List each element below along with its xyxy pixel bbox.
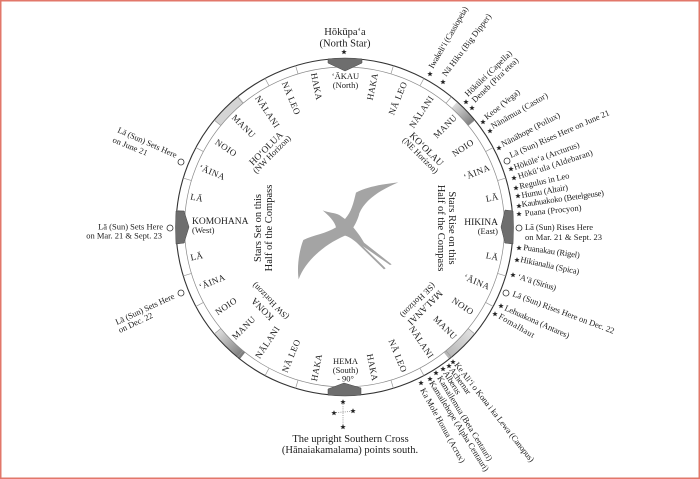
sunset label: December 22: on Dec. 22 (117, 310, 154, 335)
southeast rising stars: Fomalhaut (497, 311, 537, 340)
house labels: east half: NOIO (450, 295, 476, 317)
house labels: west half: NĀ LEO (280, 338, 303, 374)
horizon label: northwest: HOʻOLUA (248, 130, 286, 168)
cardinal marker: south (328, 383, 361, 396)
horizon label: northeast: KOʻOLAU (407, 131, 445, 169)
house labels: east half (365, 72, 500, 382)
note: stars rise: Half of the Compass (435, 185, 446, 271)
southern stars fan: Ka Mole Honua (Acrux) (418, 386, 468, 465)
horizon label: southeast: (SE Horizon) (398, 281, 438, 320)
northeast rising stars: Nānāhope (Pollux) (499, 110, 562, 149)
house labels: west half: ʻĀINA (198, 272, 227, 292)
southern cross caption (282, 434, 418, 456)
northeast rising stars (426, 4, 611, 218)
sunset label: equinox: Lā (Sun) Sets Here (98, 222, 163, 232)
house labels: west half: NOIO (213, 137, 239, 159)
house labels: east half: LĀ (485, 191, 500, 204)
sunset label: June 21: on June 21 (111, 135, 149, 158)
house labels: west half: NĀ LEO (280, 80, 303, 116)
northeast rising stars: Keoe (Vega) (482, 87, 522, 122)
house labels: east half: NĀLANI (407, 324, 436, 360)
direction label: east (464, 218, 498, 236)
southeast rising stars: Lehuakona (Antares) (503, 303, 571, 340)
house labels: west half (190, 72, 324, 382)
cardinal marker: west (176, 211, 189, 244)
house labels: west half: NĀLANI (253, 324, 282, 360)
cardinal marker: east (501, 210, 514, 244)
northeast rising stars: Hōkūlei (Capella) (462, 48, 514, 98)
northeast rising stars: Hōkūleʻa (Arcturus) (512, 139, 581, 172)
house labels: east half: NĀ LEO (387, 80, 409, 116)
note: stars rise (435, 185, 457, 271)
sunset label: December 22: Lā (Sun) Sets Here (114, 291, 176, 327)
direction label: south: HEMA (333, 356, 359, 366)
house labels: west half: HAKA (309, 72, 324, 101)
house labels: east half: MANU (431, 314, 459, 342)
southeast rising stars: ʻAʻā (Sirius) (516, 271, 558, 293)
house labels: west half: MANU (230, 112, 258, 140)
iwa bird silhouette (298, 182, 398, 279)
northeast rising stars: Regulus in Leo (518, 170, 570, 191)
house labels: west half: LĀ (190, 191, 204, 204)
direction label: north: (North) (333, 80, 358, 90)
direction label: west: (West) (192, 225, 215, 235)
northeast rising stars: Nānāmua (Castor) (489, 90, 550, 131)
north star label (319, 27, 371, 54)
southern stars fan: Kamailemua (Beta Centauri) (435, 374, 495, 463)
house labels: west half: HAKA (309, 353, 324, 382)
northeast rising stars: Humu (Altair) (521, 182, 569, 200)
southern cross caption: The upright Southern Cross (292, 434, 409, 445)
northeast rising stars: Nā Hiku (Big Dipper) (440, 11, 493, 78)
northeast rising stars: Kauhuakoko (Betelgeuse) (521, 188, 605, 209)
northeast rising stars: Iwakeliʻi (Cassiopeia) (426, 4, 470, 70)
house labels: east half: ʻĀINA (462, 272, 492, 292)
house labels: east half: HAKA (365, 353, 380, 382)
equinox sunrise label: on Mar. 21 & Sept. 23 (525, 232, 602, 242)
house labels: east half: NĀ LEO (387, 338, 409, 374)
house labels: west half: LĀ (190, 250, 204, 263)
horizon label: northeast: (NE Horizon) (400, 135, 441, 175)
house labels: west half: ʻĀINA (198, 162, 227, 182)
southern stars fan: Achernar (447, 365, 474, 396)
direction label: south: (South) (333, 365, 358, 375)
southeast rising stars: Lā (Sun) Rises Here on Dec. 22 (511, 289, 616, 336)
note: stars set: Half of the Compass (264, 185, 275, 271)
house labels: east half: NĀLANI (407, 94, 436, 130)
southeast rising stars (492, 242, 616, 340)
compass ring (176, 58, 513, 396)
direction label: west (192, 217, 249, 235)
house labels: west half: MANU (230, 314, 258, 342)
horizon label: northwest: (NW Horizon) (251, 133, 293, 175)
southern cross icon (331, 399, 356, 429)
northeast rising stars: Hōkūʻula (Aldebaran) (517, 147, 594, 181)
house labels: east half: ʻĀINA (462, 162, 492, 182)
southern cross caption: (Hānaiakamalama) points south. (282, 445, 418, 456)
southern stars fan: Ke Aliʻi o Kona i ka Lewa (Canopus) (452, 360, 537, 464)
sunset label: equinox: on Mar. 21 & Sept. 23 (86, 230, 162, 240)
southeast rising stars: Hikianalia (Spica) (520, 254, 581, 276)
sunset label: equinox (86, 222, 173, 240)
northeast rising stars: Lā (Sun) Rises Here on June 21 (508, 107, 611, 160)
sunset label: June 21: Lā (Sun) Sets Here (116, 125, 179, 160)
cardinal marker: north (328, 58, 362, 71)
house labels: east half: LĀ (485, 250, 500, 263)
direction label: north: ʻĀKAU (332, 71, 359, 81)
direction label: south (333, 356, 359, 384)
house labels: west half: NĀLANI (253, 94, 282, 130)
northeast rising stars: Puana (Procyon) (524, 202, 582, 218)
north star label: Hōkūpaʻa (324, 27, 366, 38)
house labels: east half: HAKA (365, 72, 380, 101)
direction label: east: (East) (478, 226, 498, 236)
southeast rising stars: Puanakau (Rigel) (523, 242, 581, 260)
note: stars set: Stars Set on this (253, 194, 264, 262)
north star label: (North Star) (319, 38, 371, 50)
direction label: north (332, 71, 359, 90)
equinox sunrise label: Lā (Sun) Rises Here (525, 222, 593, 232)
horizon label: southwest: KONA (250, 295, 276, 322)
southern stars fan: Kamailehope (Alpha Centauri) (427, 379, 492, 473)
direction label: south: - 90° (337, 374, 354, 384)
horizon label: southwest: (SW Horizon) (250, 281, 291, 322)
ring shaded segments (218, 100, 471, 356)
horizon label: southeast: MALANAI (405, 288, 444, 326)
note: stars set (253, 185, 275, 271)
northeast rising stars: Deneb (Piraʻetea) (469, 55, 521, 104)
direction label: west: KOMOHANA (192, 217, 249, 227)
house labels: east half: MANU (431, 112, 459, 140)
southern stars fan (418, 359, 537, 473)
equinox sunrise label (516, 222, 602, 242)
house labels: west half: NOIO (213, 295, 239, 317)
direction label: east: HIKINA (464, 218, 498, 228)
note: stars rise: Stars Rise on this (446, 191, 457, 265)
southern stars fan: Alberus (441, 369, 464, 396)
house labels: east half: NOIO (450, 137, 476, 159)
